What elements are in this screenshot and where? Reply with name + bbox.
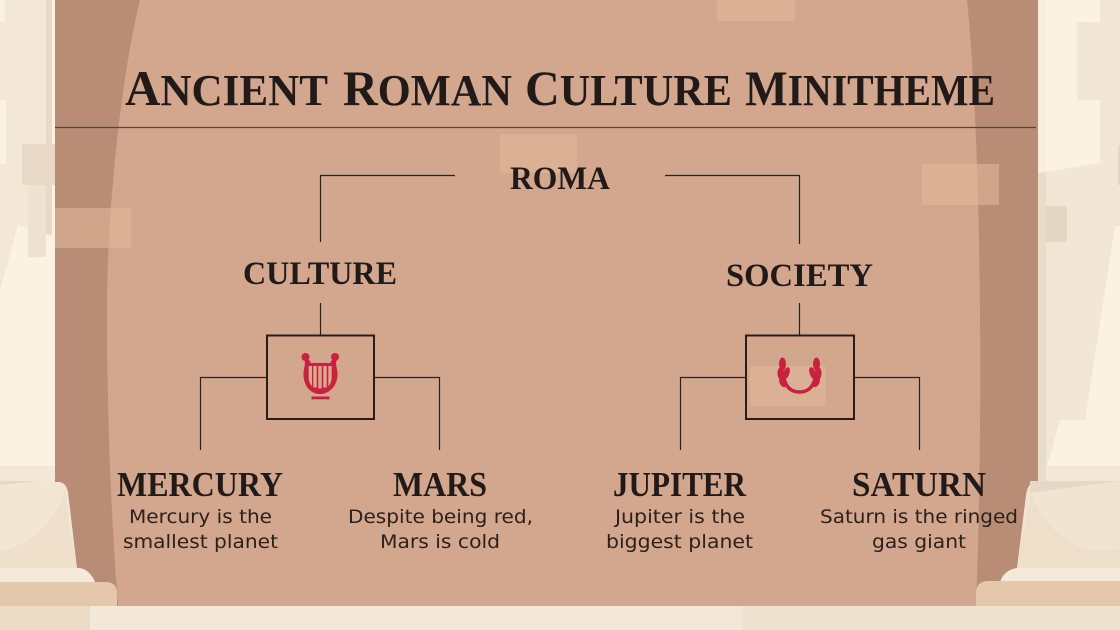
description: Jupiter: biggest planet bbox=[606, 531, 753, 553]
floor bbox=[0, 606, 1120, 630]
icon: laurel wreath bbox=[777, 358, 822, 392]
box: Society bbox=[746, 336, 854, 419]
connector: Society to box bbox=[798, 303, 800, 335]
heading: Mercury: MERCURY bbox=[117, 465, 283, 504]
heading: Culture: CULTURE bbox=[243, 256, 397, 292]
item: Mars bbox=[348, 465, 533, 553]
description: Mercury: smallest planet bbox=[123, 531, 278, 553]
title: ANCIENT bbox=[125, 60, 332, 116]
connector: Culture to box bbox=[320, 303, 322, 335]
heading: Roma: ROMA bbox=[510, 161, 610, 197]
description: Jupiter: Jupiter is the bbox=[614, 506, 745, 528]
description: Mercury: Mercury is the bbox=[129, 506, 272, 528]
item: Saturn bbox=[820, 465, 1018, 553]
title rule bbox=[55, 126, 1036, 128]
left column bbox=[0, 0, 117, 606]
connector: Roma to Society bbox=[665, 176, 800, 244]
connector: box to Mars bbox=[375, 378, 440, 450]
icon: lyre bbox=[302, 353, 339, 399]
heading: Mars: MARS bbox=[393, 465, 487, 504]
item: Mercury bbox=[117, 465, 283, 553]
translucent wall bricks bbox=[55, 0, 999, 406]
description: Mars: Despite being red, bbox=[348, 506, 533, 528]
item: Jupiter bbox=[606, 465, 753, 553]
heading: Saturn: SATURN bbox=[852, 465, 986, 504]
title: MINITHEME bbox=[745, 60, 1017, 116]
right curtain bbox=[967, 0, 1038, 606]
connector: box to Jupiter bbox=[680, 378, 745, 450]
description: Mars: Mars is cold bbox=[380, 531, 500, 553]
connector: box to Mercury bbox=[200, 378, 266, 450]
title: ROMAN bbox=[343, 60, 517, 116]
description: Saturn: gas giant bbox=[872, 531, 966, 553]
title: CULTURE bbox=[525, 60, 739, 116]
left curtain bbox=[55, 0, 140, 606]
box: Culture bbox=[267, 336, 374, 419]
heading: Society: SOCIETY bbox=[726, 258, 873, 294]
heading: Jupiter: JUPITER bbox=[613, 465, 747, 504]
connector: Roma to Culture bbox=[320, 176, 455, 242]
connector: box to Saturn bbox=[855, 378, 920, 450]
description: Saturn: Saturn is the ringed bbox=[820, 506, 1018, 528]
right column bbox=[976, 0, 1120, 606]
